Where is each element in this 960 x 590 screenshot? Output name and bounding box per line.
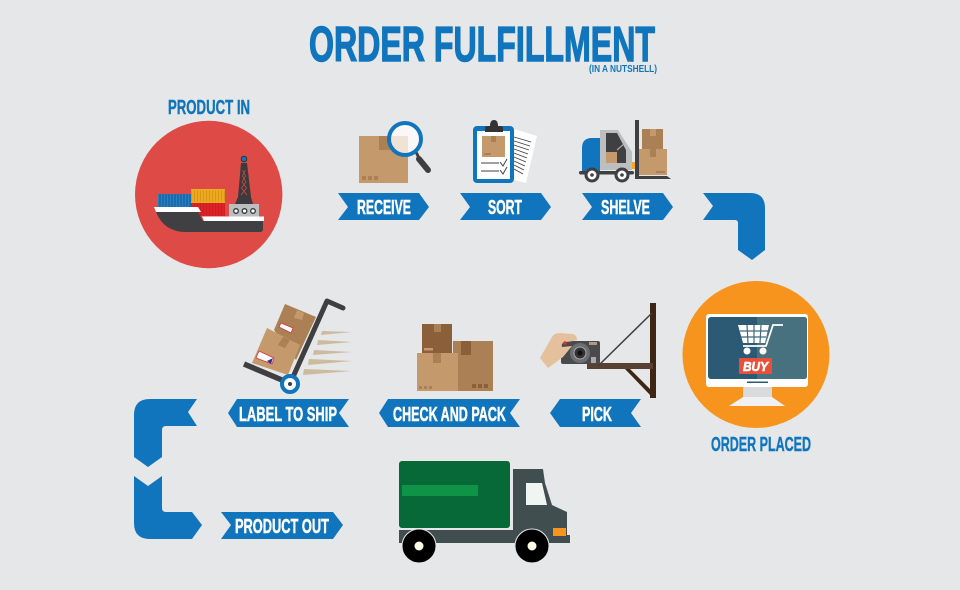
ribbon: check and pack bbox=[379, 399, 520, 427]
heading: product in: PRODUCT IN bbox=[168, 97, 250, 119]
heading: order placed: ORDER PLACED bbox=[711, 434, 811, 456]
icon: stacked boxes bbox=[417, 324, 493, 391]
ribbon: sort bbox=[460, 193, 551, 220]
ribbon: receive: RECEIVE bbox=[357, 197, 411, 219]
ribbon: product out: PRODUCT OUT bbox=[235, 516, 329, 538]
ribbon: pick bbox=[550, 399, 641, 427]
ribbon: shelve: SHELVE bbox=[601, 197, 650, 219]
ribbon: product out bbox=[221, 512, 343, 539]
icon: clipboard with list bbox=[473, 120, 537, 183]
arrow: lower corner turning right bbox=[134, 476, 202, 539]
icon: box with magnifier bbox=[359, 123, 428, 183]
ribbon: shelve bbox=[582, 193, 673, 220]
subtitle: (IN A NUTSHELL) bbox=[589, 64, 657, 75]
icon: computer with cart in orange circle bbox=[682, 281, 830, 428]
arrow: top right corner turning down bbox=[703, 193, 765, 260]
title: ORDER FULFILLMENT bbox=[309, 18, 655, 72]
icon: hand scanning on shelf bbox=[540, 303, 656, 398]
arrow: left corner turning down bbox=[134, 399, 197, 467]
ribbon: label to ship bbox=[228, 399, 349, 427]
ribbon: receive bbox=[338, 193, 429, 220]
icon: delivery truck bbox=[399, 461, 570, 563]
icon: computer with cart in orange circle: BUY bbox=[743, 359, 769, 374]
icon: forklift with boxes bbox=[579, 120, 671, 181]
icon: hand truck with boxes bbox=[244, 301, 352, 392]
ribbon: pick: PICK bbox=[582, 404, 612, 426]
ribbon: check and pack: CHECK AND PACK bbox=[393, 404, 506, 426]
ribbon: sort: SORT bbox=[488, 197, 522, 219]
icon: cargo ship in red circle bbox=[135, 121, 282, 268]
ribbon: label to ship: LABEL TO SHIP bbox=[239, 404, 337, 426]
